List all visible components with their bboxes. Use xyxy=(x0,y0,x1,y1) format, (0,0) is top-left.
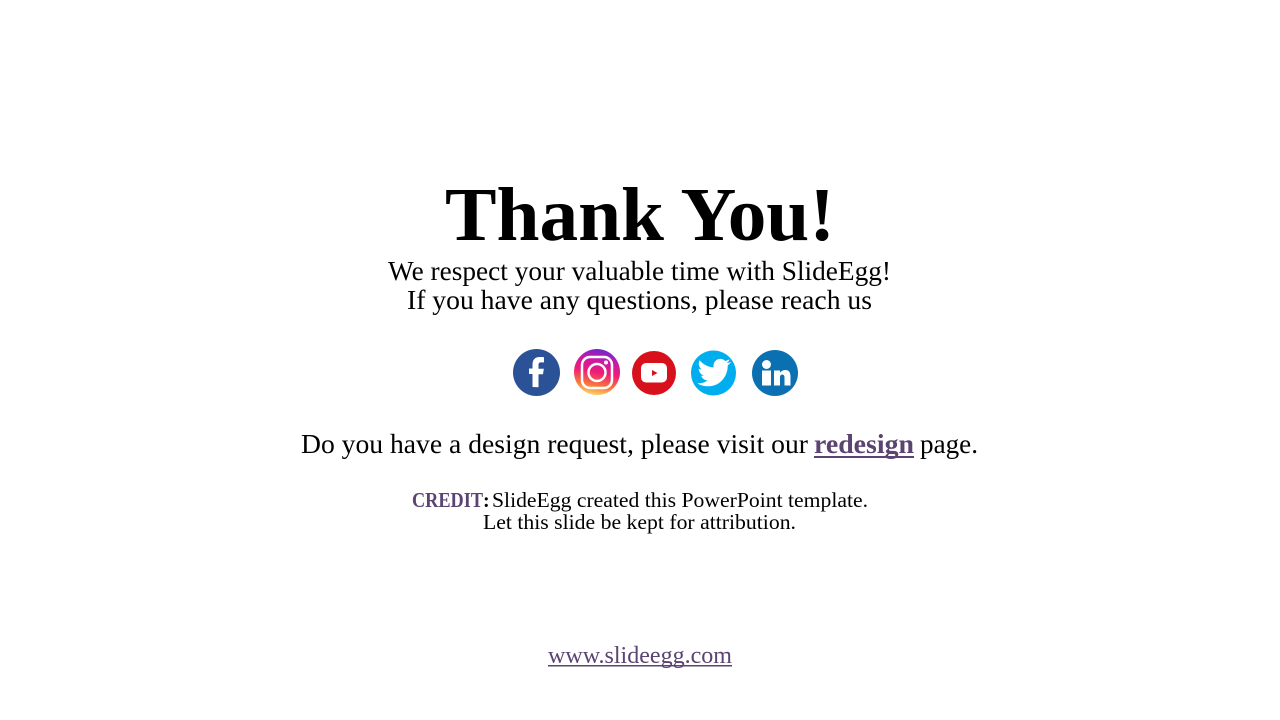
design request line: Do you have a design request, please visit our xyxy=(301,428,808,459)
icon: facebook xyxy=(513,349,560,396)
credit text xyxy=(412,488,868,534)
social icons row xyxy=(513,349,798,396)
icon: linkedin xyxy=(752,350,798,396)
credit text: CREDIT xyxy=(412,488,483,512)
icon: instagram xyxy=(574,349,620,395)
credit text: Let this slide be kept for attribution. xyxy=(483,510,796,534)
design request line: page. xyxy=(920,428,978,459)
subtitle text: If you have any questions, please reach us xyxy=(407,284,872,315)
website link: www.slideegg.com xyxy=(548,643,732,669)
icon: youtube xyxy=(632,351,676,395)
title: Thank You! xyxy=(445,173,835,257)
design request line: redesign xyxy=(814,428,914,459)
icon: twitter xyxy=(691,350,736,396)
subtitle text xyxy=(388,255,891,315)
credit text: SlideEgg created this PowerPoint template. xyxy=(492,488,868,512)
credit text: : xyxy=(483,490,490,512)
subtitle text: We respect your valuable time with SlideEgg! xyxy=(388,255,891,286)
